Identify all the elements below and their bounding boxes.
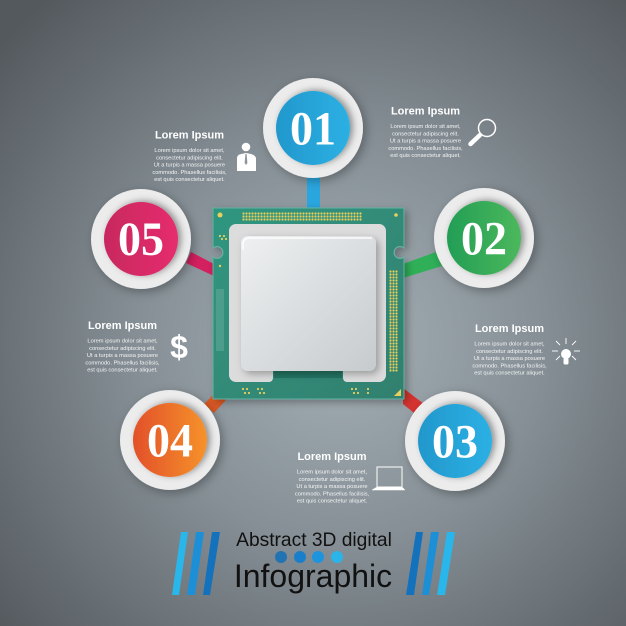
corner marks and small contacts bbox=[218, 212, 401, 396]
text block 02 bbox=[472, 323, 547, 377]
badge 04: 04 bbox=[147, 414, 193, 468]
footer title: line 2: Infographic bbox=[234, 558, 392, 594]
text block 02: Ut a turpis a massa posuere bbox=[474, 356, 545, 362]
badge 05 bbox=[91, 189, 191, 289]
text block 04: commodo. Phasellus facilisis, bbox=[85, 360, 160, 366]
icon: magnifying glass bbox=[470, 120, 496, 144]
icon: dollar sign: $ bbox=[170, 329, 188, 365]
text block 04: est quis consectetur aliquet. bbox=[87, 368, 158, 374]
text block 03: Lorem Ipsum bbox=[297, 451, 367, 463]
text block 01: Lorem Ipsum bbox=[391, 106, 460, 118]
chip label strip bbox=[216, 289, 224, 351]
text block 05: Lorem Ipsum bbox=[155, 130, 224, 142]
chip board bbox=[213, 208, 404, 399]
processor chip bbox=[213, 208, 404, 399]
top pin row bbox=[242, 212, 362, 221]
badge 03 bbox=[405, 391, 505, 491]
badge 02: 02 bbox=[461, 212, 507, 266]
text block 01: Lorem ipsum dolor sit amet, bbox=[390, 124, 461, 130]
text block 05: est quis consectetur aliquet. bbox=[154, 177, 225, 183]
text block 04: Lorem Ipsum bbox=[88, 320, 157, 332]
text block 03: commodo. Phasellus facilisis, bbox=[295, 491, 370, 497]
badge 03: 03 bbox=[432, 416, 478, 468]
text block 01: consectetur adipiscing elit. bbox=[392, 131, 459, 137]
connector: 05 bbox=[186, 252, 214, 276]
connector: 01 bbox=[307, 170, 320, 210]
text block 04: consectetur adipiscing elit. bbox=[89, 346, 156, 352]
text block 01: est quis consectetur aliquet. bbox=[390, 153, 461, 159]
lid highlight bbox=[243, 238, 372, 250]
text block 05: Lorem ipsum dolor sit amet, bbox=[154, 148, 225, 154]
text block 05: consectetur adipiscing elit. bbox=[156, 155, 223, 161]
footer stripes right bbox=[406, 532, 455, 595]
text block 05: commodo. Phasellus facilisis, bbox=[152, 170, 227, 176]
connector: 04 bbox=[204, 395, 226, 413]
text block 01 bbox=[388, 106, 463, 159]
footer stripes left bbox=[172, 532, 220, 595]
text block 04: Lorem ipsum dolor sit amet, bbox=[87, 338, 158, 344]
text block 05: Ut a turpis a massa posuere bbox=[154, 163, 225, 169]
text block 01: Ut a turpis a massa posuere bbox=[390, 139, 461, 145]
text block 02: commodo. Phasellus facilisis, bbox=[472, 363, 547, 369]
text block 04: Ut a turpis a massa posuere bbox=[87, 353, 158, 359]
text block 03: Lorem ipsum dolor sit amet, bbox=[297, 470, 368, 476]
heat spreader base bbox=[229, 224, 386, 382]
text block 03: Ut a turpis a massa posuere bbox=[296, 484, 368, 490]
side pin row bbox=[389, 270, 398, 372]
badge 01: 01 bbox=[290, 102, 336, 156]
text block 02: consectetur adipiscing elit. bbox=[476, 349, 543, 355]
connector: 02 bbox=[403, 252, 442, 278]
icon: laptop bbox=[372, 467, 405, 490]
text block 01: commodo. Phasellus facilisis, bbox=[388, 146, 463, 152]
text block 05 bbox=[152, 130, 227, 183]
heat spreader lid bbox=[241, 236, 376, 371]
text block 02: Lorem Ipsum bbox=[475, 323, 544, 335]
text block 03: est quis consectetur aliquet. bbox=[297, 499, 368, 505]
badge 02 bbox=[434, 188, 534, 288]
badge 04 bbox=[120, 390, 220, 490]
text block 03 bbox=[295, 451, 370, 505]
badge 01 bbox=[263, 78, 363, 178]
footer dots bbox=[275, 551, 343, 563]
icon: light bulb bbox=[552, 338, 580, 364]
text block 03: consectetur adipiscing elit. bbox=[299, 477, 366, 483]
notch shadow bbox=[274, 371, 342, 378]
icon: businessman bbox=[237, 143, 256, 171]
text block 04 bbox=[85, 320, 160, 374]
footer title: line 1: Abstract 3D digital bbox=[236, 530, 392, 551]
text block 02: Lorem ipsum dolor sit amet, bbox=[474, 342, 545, 348]
text block 02: est quis consectetur aliquet. bbox=[474, 371, 545, 377]
connector: 03 bbox=[403, 388, 424, 413]
badge 05: 05 bbox=[118, 213, 164, 266]
